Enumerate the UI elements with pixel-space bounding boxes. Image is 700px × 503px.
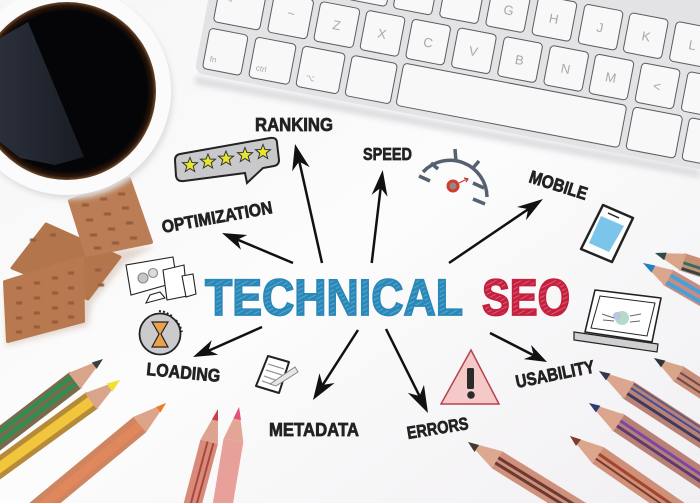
- keyboard: ~: [286, 5, 297, 22]
- label: optimization: OPTIMIZATION: [160, 197, 274, 237]
- icon: notepad: [256, 356, 298, 393]
- pencil: purple: [583, 395, 700, 502]
- pencil: blue: [638, 255, 700, 315]
- arrow: errors: [386, 329, 436, 417]
- keyboard: H: [548, 11, 560, 27]
- label: loading: LOADING: [146, 359, 221, 386]
- pencil: yellow: [0, 372, 126, 496]
- title: TECHNICAL: TECHNICAL: [205, 269, 463, 326]
- keyboard: [194, 0, 700, 208]
- arrow: metadata: [305, 330, 358, 405]
- pencil: orange: [29, 403, 166, 503]
- coffee reflection: [0, 22, 84, 165]
- keyboard: fn: [209, 55, 217, 65]
- pencil: dark: [649, 350, 700, 403]
- keyboard: C: [422, 34, 434, 51]
- keyboard: N: [560, 61, 572, 77]
- cookie: middle: [12, 224, 120, 299]
- pencil: brown-red: [570, 436, 685, 503]
- cookie: front: [5, 258, 83, 341]
- label: errors: ERRORS: [405, 413, 470, 443]
- keyboard: X: [376, 26, 388, 42]
- keyboard: Z: [331, 17, 342, 33]
- pencil: dark brown: [468, 442, 586, 503]
- icon: speedometer: [419, 149, 487, 204]
- label: metadata: METADATA: [269, 420, 359, 440]
- label: speed: SPEED: [363, 144, 412, 164]
- keyboard: J: [595, 20, 605, 36]
- pencil: indigo: [594, 363, 700, 458]
- keyboard: M: [604, 69, 618, 86]
- keyboard: K: [640, 28, 652, 45]
- icon: star rating bubble: [175, 138, 279, 183]
- label: mobile: MOBILE: [527, 167, 590, 204]
- pencil: pink: [213, 407, 243, 503]
- keyboard: B: [514, 52, 525, 68]
- keyboard: ⌥: [305, 73, 316, 83]
- arrow: ranking: [286, 142, 322, 263]
- cookies: [5, 179, 156, 346]
- pencils: right: [468, 244, 700, 503]
- icon: hourglass: [140, 311, 182, 354]
- icon: devices: [126, 257, 196, 303]
- cookie texture: [16, 194, 137, 332]
- arrow: optimization: [219, 226, 293, 263]
- keyboard: ctrl: [255, 63, 268, 74]
- icon: warning triangle: [441, 350, 499, 404]
- title: SEO: SEO: [482, 269, 570, 326]
- label: ranking: RANKING: [255, 114, 333, 135]
- pencils: left: [0, 351, 243, 503]
- arrow: mobile: [449, 192, 547, 263]
- arrow: speed: [372, 169, 391, 263]
- keyboard: <: [652, 78, 662, 94]
- icon: smartphone: [581, 205, 633, 262]
- title: [205, 269, 570, 326]
- arrow: usability: [490, 333, 551, 369]
- keyboard: G: [502, 2, 515, 18]
- pencil: teal: [652, 244, 700, 289]
- cookie: top: [70, 179, 151, 255]
- pencil: red: [184, 409, 218, 503]
- arrow: loading: [190, 327, 262, 364]
- coffee cup: [0, 0, 173, 199]
- icon: laptop: [574, 290, 661, 352]
- label: usability: USABILITY: [514, 357, 596, 392]
- pencil: green: [0, 351, 109, 467]
- keyboard: L: [687, 37, 697, 53]
- coffee: [0, 2, 156, 180]
- keyboard: V: [468, 43, 479, 59]
